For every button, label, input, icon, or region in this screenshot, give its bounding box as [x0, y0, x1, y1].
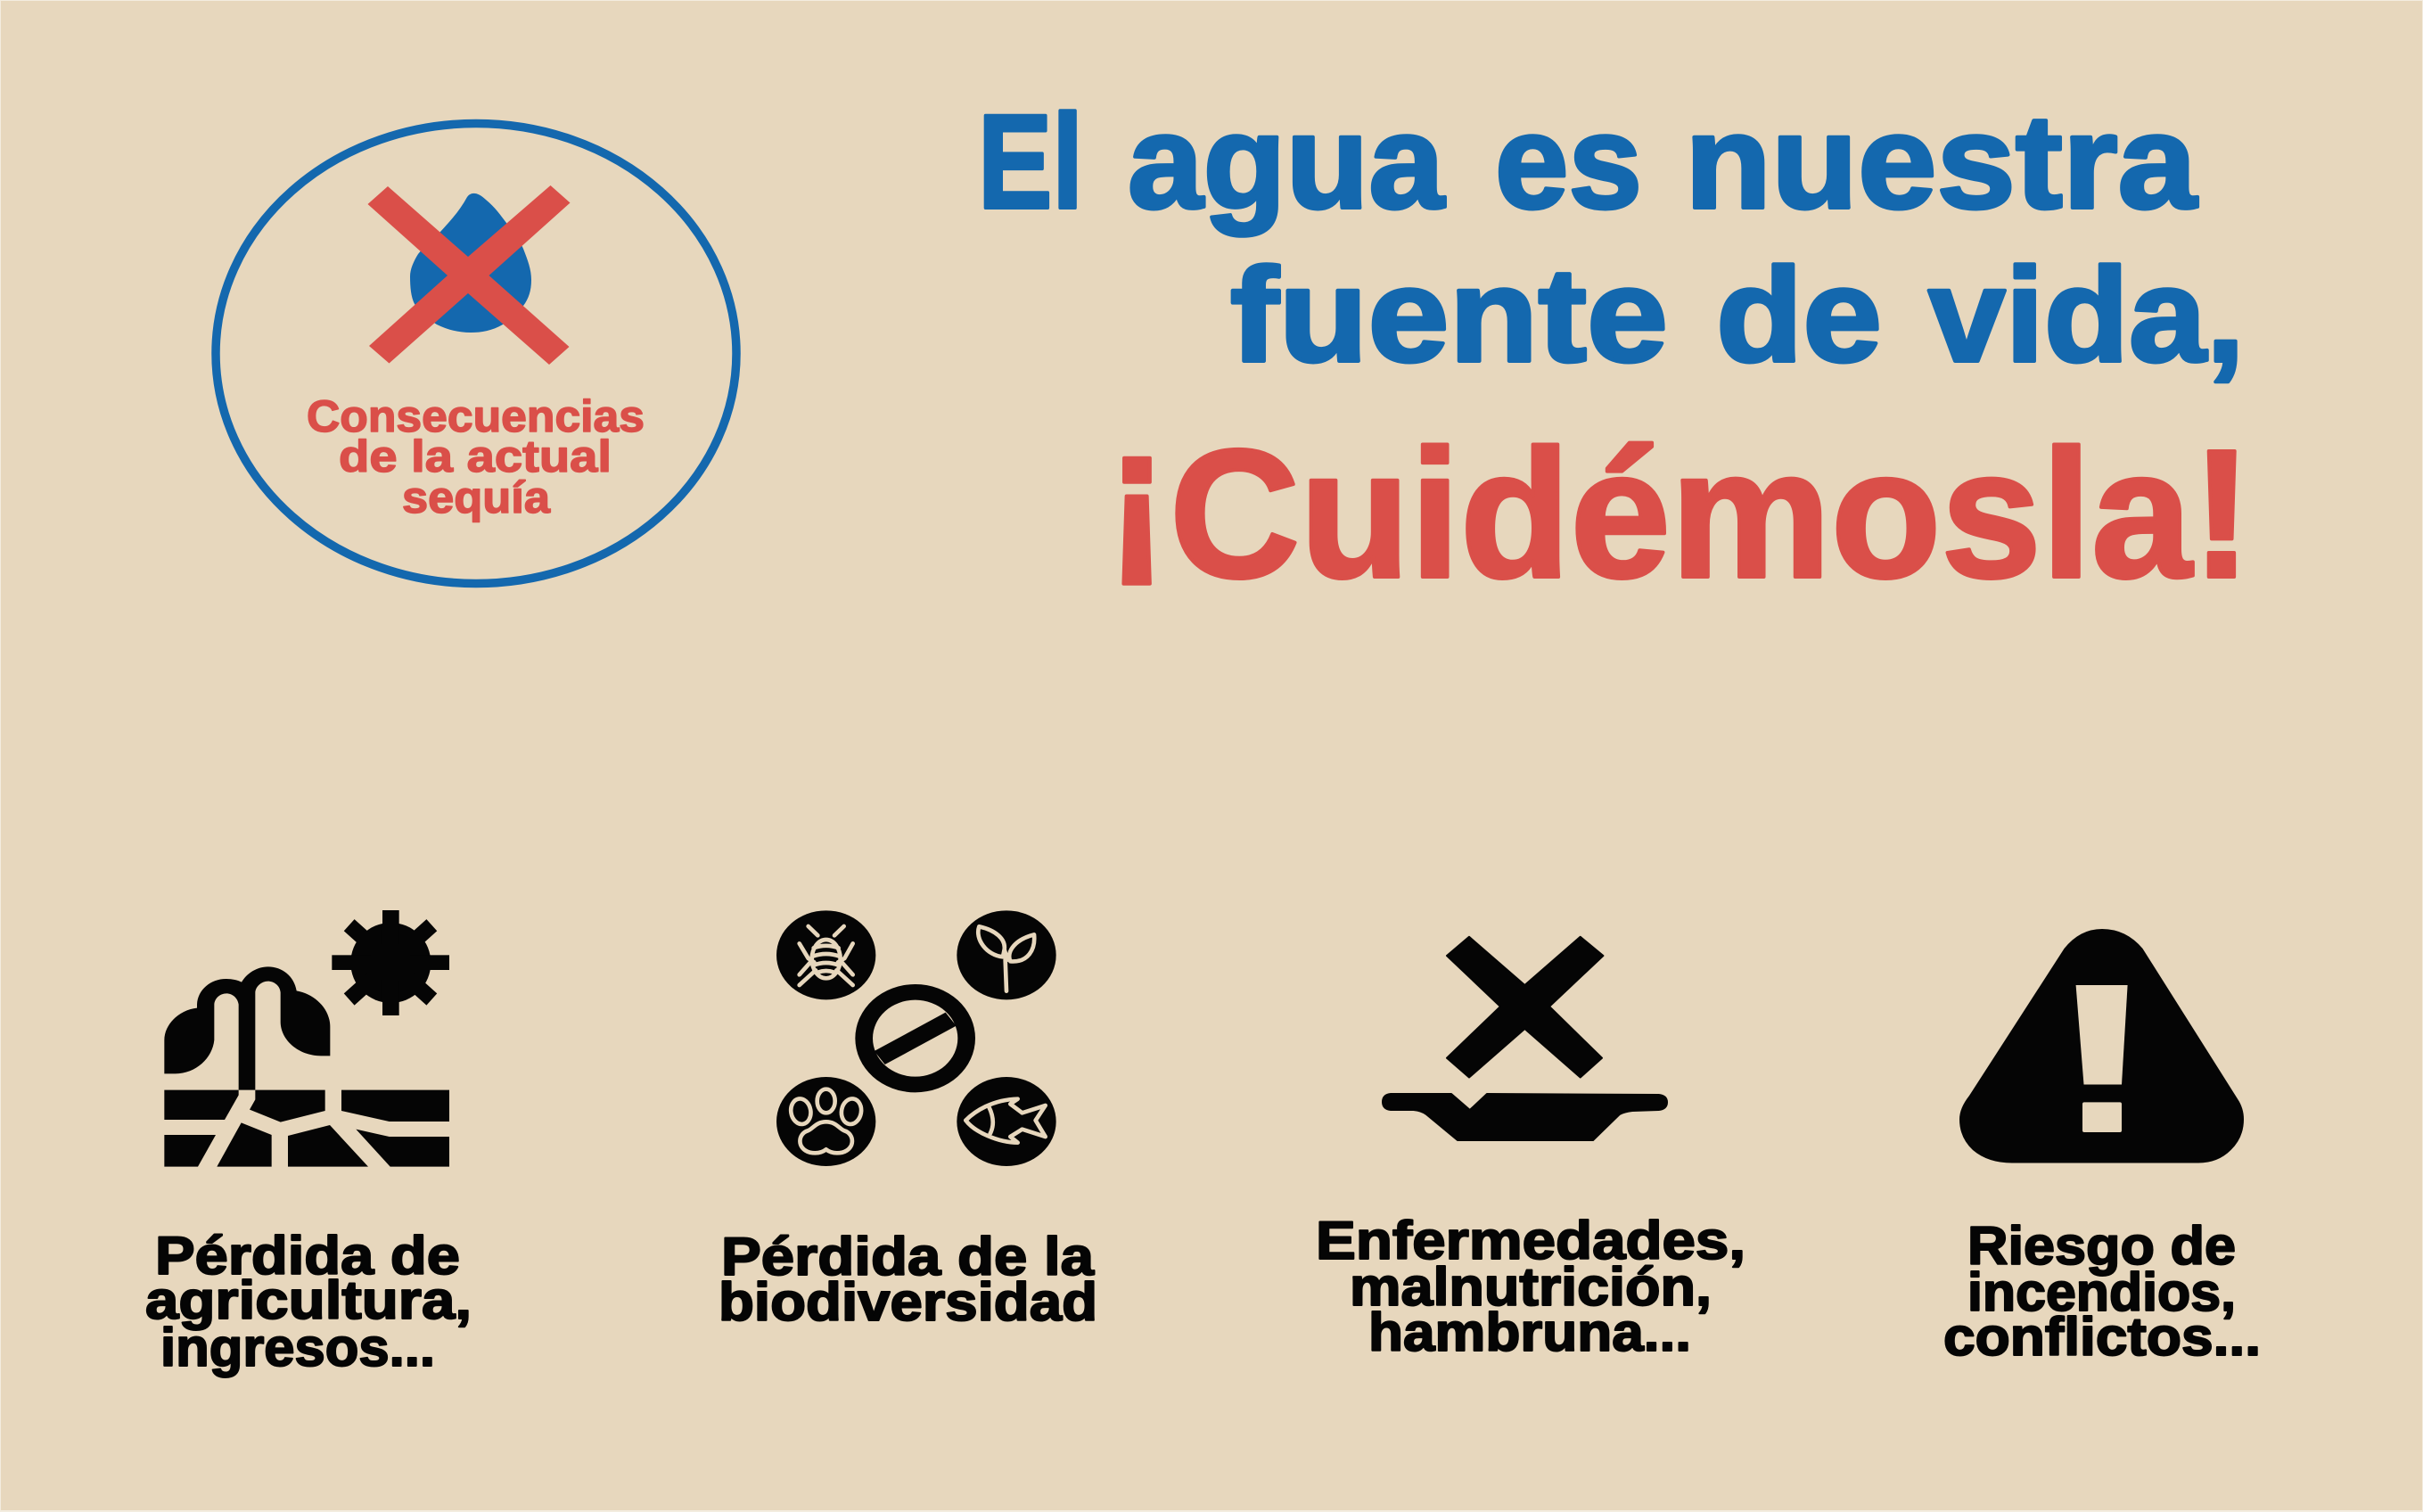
title: es: [1495, 86, 1642, 236]
icon: sprout: [957, 910, 1056, 999]
label: pérdida de agricultura: agricultura,: [145, 1270, 472, 1330]
badge: consecuencias de la actual sequía: [216, 123, 736, 583]
label: pérdida de agricultura: [145, 1226, 472, 1377]
title: de: [1716, 240, 1882, 390]
title: agua: [1128, 86, 1446, 236]
label: enfermedades: [1316, 1211, 1745, 1362]
label: riesgo de incendios: [1943, 1216, 2261, 1367]
label: enfermedades: hambruna...: [1368, 1302, 1691, 1362]
badge caption: de la actual: [339, 431, 612, 481]
icon: water drop: [410, 193, 531, 333]
badge caption: sequía: [402, 472, 551, 522]
icon: fish: [957, 1077, 1056, 1166]
label: pérdida de la biodiversidad: biodiversidad: [719, 1272, 1097, 1332]
label: riesgo de incendios: incendios,: [1967, 1262, 2236, 1322]
icon: biodiversity loss: [776, 910, 1056, 1166]
icon: red cross: [367, 185, 571, 365]
title: vida,: [1928, 240, 2245, 390]
badge caption: Consecuencias: [307, 391, 645, 441]
title: fuente: [1230, 240, 1668, 390]
icon: dead plant, sun and cracked soil: [164, 910, 449, 1167]
label: pérdida de agricultura: Pérdida de: [155, 1226, 460, 1286]
title: El: [978, 86, 1083, 236]
label: riesgo de incendios: conflictos...: [1943, 1307, 2261, 1367]
label: riesgo de incendios: Riesgo de: [1967, 1216, 2236, 1276]
label: pérdida de la biodiversidad: [719, 1227, 1097, 1332]
title: ¡: [1106, 390, 1167, 594]
title: Cuidémosla!: [1170, 412, 2252, 616]
badge caption: [307, 391, 645, 522]
icon: insect: [776, 910, 875, 999]
icon: empty bowl with cross: [1383, 937, 1667, 1140]
title: nuestra: [1685, 86, 2198, 236]
badge ring: [216, 123, 736, 583]
label: enfermedades: Enfermedades,: [1316, 1211, 1745, 1270]
icon: prohibition sign: [855, 984, 975, 1092]
icon: warning triangle: [1959, 929, 2244, 1163]
label: pérdida de agricultura: ingresos...: [160, 1318, 435, 1377]
icon: paw: [776, 1077, 875, 1166]
label: enfermedades: malnutrición,: [1350, 1257, 1712, 1317]
title: [978, 86, 2252, 616]
label: pérdida de la biodiversidad: Pérdida de la: [721, 1227, 1095, 1286]
